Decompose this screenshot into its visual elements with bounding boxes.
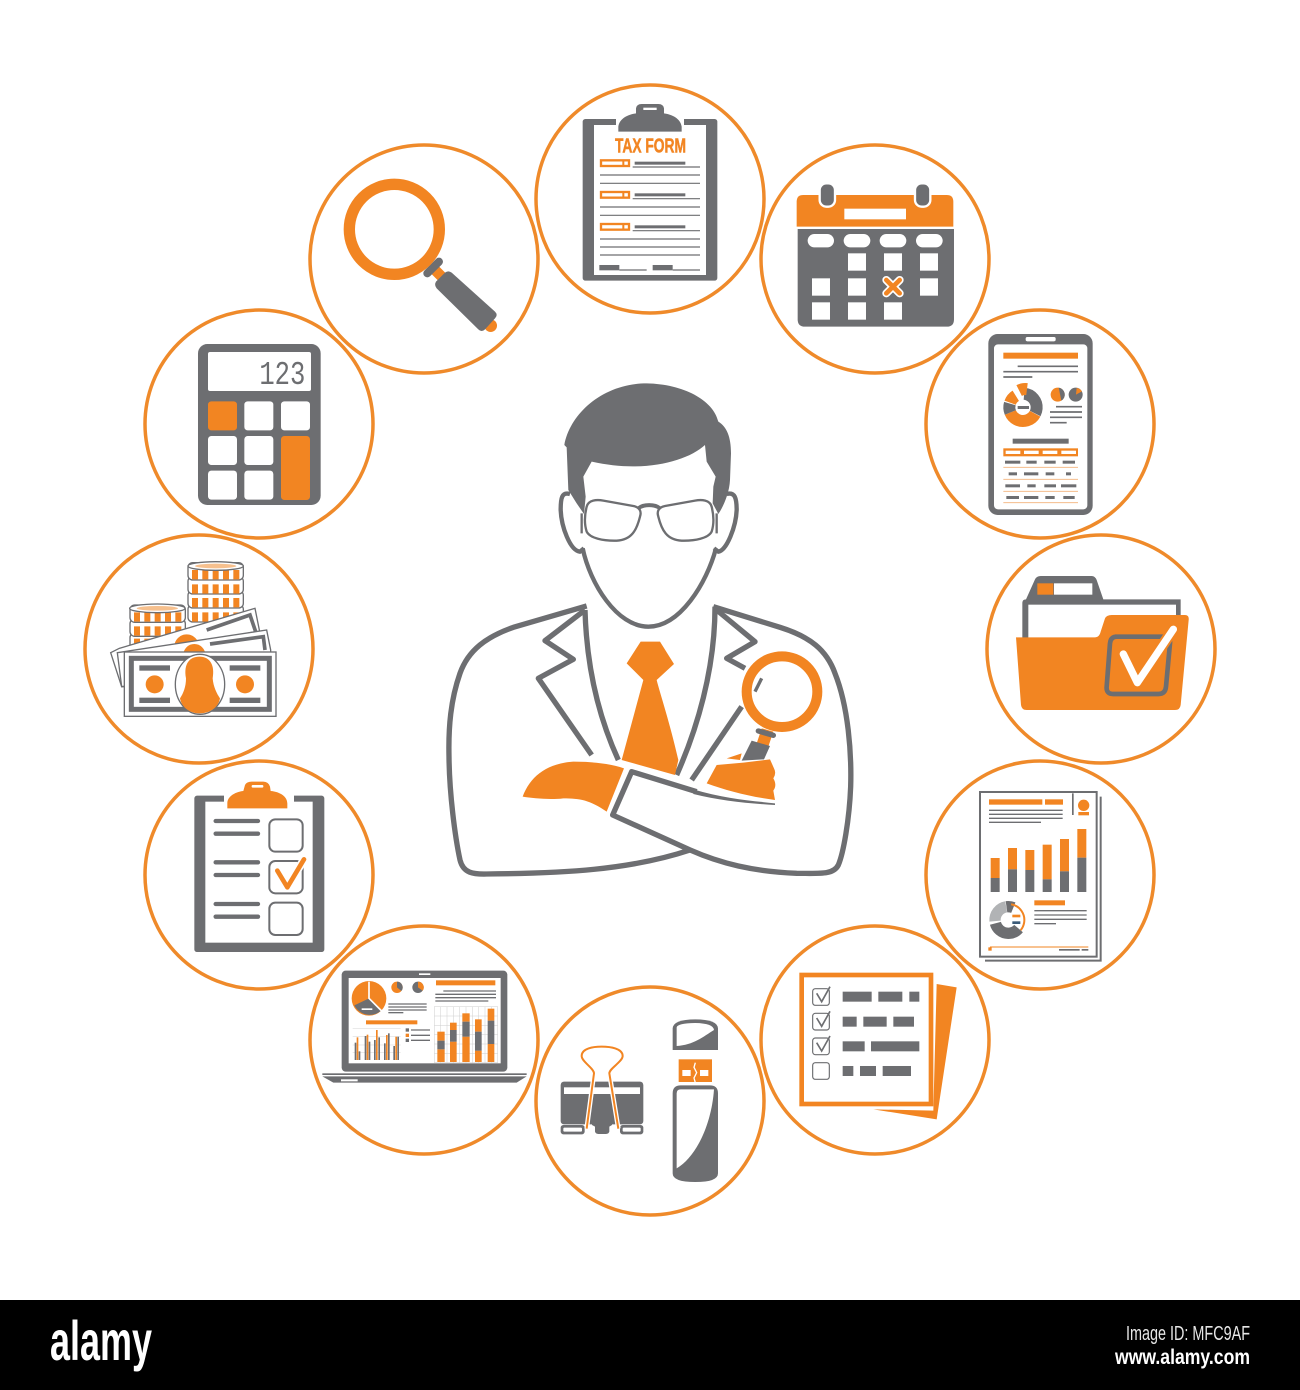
ring — [926, 310, 1154, 538]
icon: report page with bar chart — [980, 792, 1101, 961]
panel: folder — [987, 535, 1215, 763]
icon: tax form clipboard — [583, 104, 717, 281]
alamy logo: alamy — [50, 1309, 152, 1372]
donut chart — [1005, 384, 1044, 426]
small pies — [391, 982, 403, 993]
footer bar — [0, 1300, 1300, 1390]
panel: calculator — [145, 310, 373, 538]
marked date — [886, 280, 900, 293]
ring — [145, 761, 373, 989]
ring — [761, 145, 989, 373]
jacket outline — [449, 606, 851, 874]
form title: TAX FORM — [615, 134, 686, 157]
ring — [536, 85, 764, 313]
panel: calendar — [761, 145, 989, 373]
crossed arm left hand — [523, 762, 624, 812]
icon: clipboard with checkboxes — [194, 782, 324, 952]
donut chart — [990, 901, 1027, 939]
panel: laptop analytics — [310, 926, 538, 1154]
icon: folder with checkmark — [1016, 576, 1189, 710]
ring — [85, 535, 313, 763]
panel: mobile report — [926, 310, 1154, 538]
ring — [310, 926, 538, 1154]
panel: tax form — [536, 85, 764, 313]
front banknote — [124, 652, 276, 716]
small pie charts — [1051, 388, 1065, 402]
ears and face outline — [561, 494, 737, 627]
sleeve taper — [693, 789, 775, 805]
panel: money — [85, 535, 313, 763]
stacked bar grid chart — [434, 1007, 498, 1063]
website: www.alamy.com — [1114, 1346, 1250, 1369]
icon: phone with report — [988, 334, 1093, 515]
icon: USB flash drive — [673, 1019, 718, 1182]
display digits: 123 — [259, 357, 305, 395]
panel: clipboard checklist — [145, 761, 373, 989]
ring — [536, 987, 764, 1215]
magnifier — [742, 656, 817, 761]
table — [1003, 448, 1078, 456]
mini bar chart — [353, 1029, 401, 1053]
back banknotes — [111, 608, 263, 687]
ring — [145, 310, 373, 538]
ring — [987, 535, 1215, 763]
icon: magnifying glass — [349, 184, 497, 332]
icon: calculator — [198, 344, 321, 505]
ring — [310, 145, 538, 373]
hair — [564, 383, 731, 514]
icon: checklist page — [802, 975, 957, 1119]
hand holding magnifier — [707, 753, 775, 800]
icon: laptop with charts — [322, 971, 527, 1083]
panel: flash drive and binder clip — [536, 987, 764, 1215]
tie — [622, 642, 678, 775]
panel: magnifying glass — [310, 145, 538, 373]
panel: financial report — [926, 761, 1154, 989]
image id: Image ID: MFC9AF — [1126, 1323, 1250, 1345]
central figure: inspector with magnifier — [449, 383, 851, 874]
pie chart — [352, 981, 386, 1016]
icon: coins stacks and banknotes — [111, 562, 276, 716]
ring — [761, 926, 989, 1154]
icon: calendar — [797, 183, 954, 327]
glasses — [582, 500, 717, 541]
panel: checklist — [761, 926, 989, 1154]
icon: binder clip — [561, 1047, 643, 1134]
ring — [926, 761, 1154, 989]
